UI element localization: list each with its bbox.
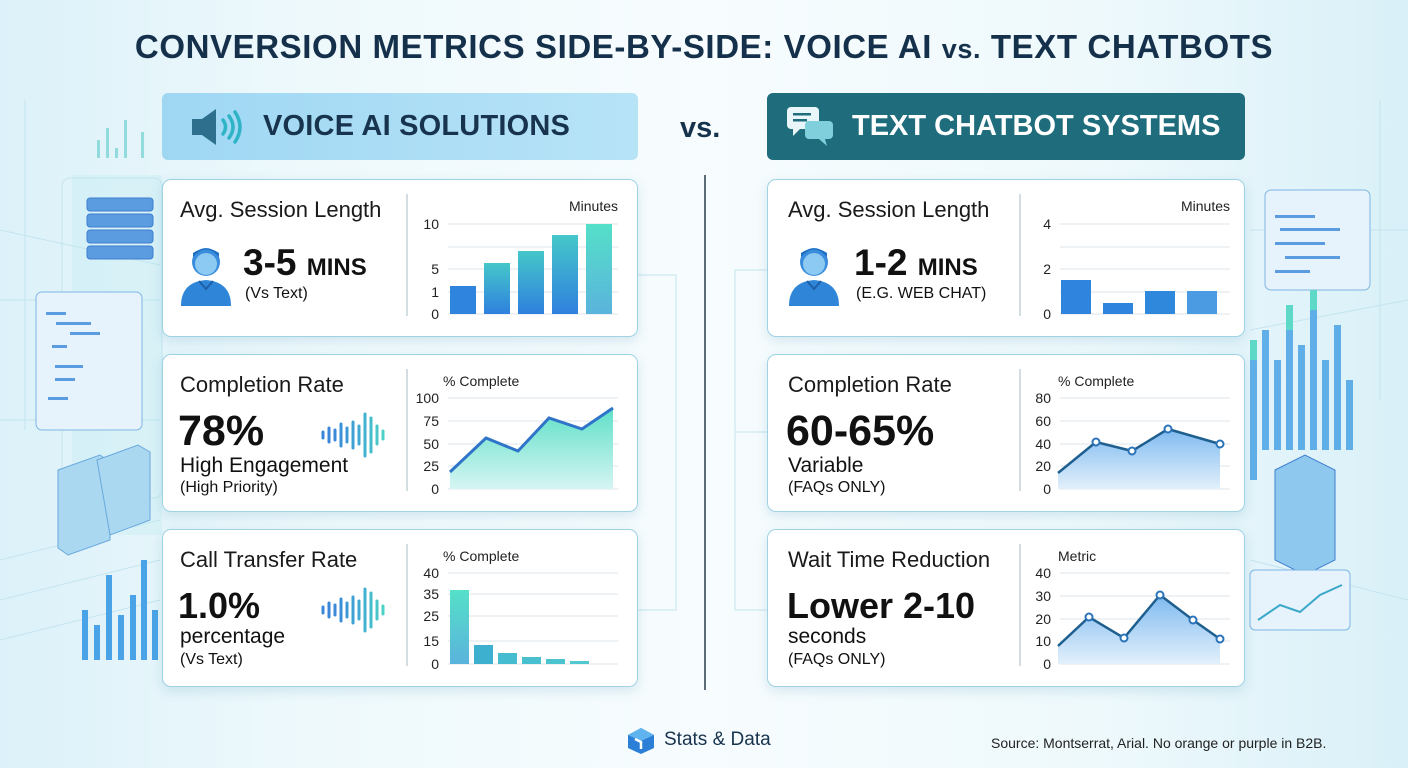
area chart: % complete bbox=[416, 373, 618, 497]
area chart: % complete: 100 bbox=[416, 390, 439, 406]
panel: voice avg session length: (Vs Text) bbox=[245, 285, 308, 302]
panel: chatbot avg session length: (E.G. WEB CHAT) bbox=[856, 285, 986, 302]
area chart: % complete: 40 bbox=[1035, 436, 1051, 452]
panel: chatbot wait time reduction: (FAQs ONLY) bbox=[788, 651, 886, 668]
panel: voice call transfer rate: percentage bbox=[180, 625, 285, 648]
icon: waveform bbox=[322, 588, 384, 632]
panel: voice avg session length: Avg. Session Length bbox=[180, 197, 381, 222]
bar chart: transfer: 15 bbox=[423, 633, 439, 649]
panel: voice call transfer rate bbox=[162, 529, 638, 687]
area chart: % complete: 0 bbox=[1043, 481, 1051, 497]
panel: chatbot wait time reduction bbox=[767, 529, 1245, 687]
panel: chatbot completion rate bbox=[767, 354, 1245, 512]
panel: chatbot avg session length: 1-2 MINS bbox=[854, 242, 978, 283]
panel: chatbot completion rate: 60-65% bbox=[786, 407, 934, 455]
bar chart: transfer: 35 bbox=[423, 586, 439, 602]
bar chart: minutes: Minutes bbox=[1181, 198, 1230, 214]
icon: person bbox=[181, 248, 231, 306]
bar chart: minutes: 0 bbox=[431, 306, 439, 322]
bar chart: minutes bbox=[423, 198, 618, 322]
bar chart: transfer: 0 bbox=[431, 656, 439, 672]
bar chart: transfer bbox=[423, 548, 618, 672]
panel: chatbot wait time reduction: Wait Time Reduction bbox=[788, 547, 990, 572]
panel: voice call transfer rate: 1.0% bbox=[178, 585, 260, 626]
panel: voice call transfer rate: Call Transfer Rate bbox=[180, 547, 357, 572]
area chart: metric: 10 bbox=[1035, 633, 1051, 649]
area chart: % complete: 0 bbox=[431, 481, 439, 497]
bar chart: transfer: % Complete bbox=[443, 548, 519, 564]
panel: chatbot completion rate: (FAQs ONLY) bbox=[788, 479, 886, 496]
bar chart: transfer: 25 bbox=[423, 608, 439, 624]
panel: voice completion rate: 78% bbox=[178, 407, 264, 455]
bar chart: minutes: 1 bbox=[431, 284, 439, 300]
area chart: % complete: 25 bbox=[423, 458, 439, 474]
area chart: % complete: % Complete bbox=[443, 373, 519, 389]
panel: voice completion rate bbox=[162, 354, 638, 512]
area chart: metric bbox=[1035, 548, 1230, 672]
area chart: metric: 30 bbox=[1035, 588, 1051, 604]
panel: chatbot avg session length bbox=[767, 179, 1245, 337]
bar chart: minutes: 4 bbox=[1043, 216, 1051, 232]
bar chart: minutes: Minutes bbox=[569, 198, 618, 214]
icon: person bbox=[789, 248, 839, 306]
area chart: % complete: 20 bbox=[1035, 458, 1051, 474]
area chart: metric: 40 bbox=[1035, 565, 1051, 581]
area chart: % complete bbox=[1035, 373, 1230, 497]
icon: waveform bbox=[322, 412, 384, 458]
bar chart: minutes: 0 bbox=[1043, 306, 1051, 322]
bar chart: minutes bbox=[1043, 198, 1230, 322]
title: CONVERSION METRICS SIDE-BY-SIDE: VOICE AI vs. TEXT CHATBOTS bbox=[135, 28, 1273, 65]
area chart: metric: 0 bbox=[1043, 656, 1051, 672]
source note: Source: Montserrat, Arial. No orange or purple in B2B. bbox=[991, 735, 1326, 751]
footer logo bbox=[628, 728, 771, 754]
area chart: % complete: 80 bbox=[1035, 390, 1051, 406]
area chart: % complete: 50 bbox=[423, 436, 439, 452]
header: voice ai: VOICE AI SOLUTIONS bbox=[263, 110, 570, 142]
area chart: metric: 20 bbox=[1035, 611, 1051, 627]
panel: chatbot completion rate: Completion Rate bbox=[788, 372, 952, 397]
panel: chatbot wait time reduction: Lower 2-10 bbox=[787, 585, 975, 626]
bar chart: minutes: 10 bbox=[423, 216, 439, 232]
header: text chatbot: TEXT CHATBOT SYSTEMS bbox=[852, 110, 1220, 142]
area chart: metric: Metric bbox=[1058, 548, 1096, 564]
footer logo: Stats & Data bbox=[664, 729, 771, 750]
panel: voice call transfer rate: (Vs Text) bbox=[180, 651, 243, 668]
panel: voice completion rate: Completion Rate bbox=[180, 372, 344, 397]
header: text chatbot bbox=[767, 93, 1245, 160]
icon: chat bubbles bbox=[787, 107, 833, 146]
panel: voice completion rate: High Engagement bbox=[180, 454, 348, 477]
panel: voice completion rate: (High Priority) bbox=[180, 479, 278, 496]
area chart: % complete: 60 bbox=[1035, 413, 1051, 429]
bar chart: minutes: 5 bbox=[431, 261, 439, 277]
panel: voice avg session length bbox=[162, 179, 638, 337]
icon: speaker bbox=[192, 109, 242, 145]
bar chart: minutes: 2 bbox=[1043, 261, 1051, 277]
bar chart: transfer: 40 bbox=[423, 565, 439, 581]
header: voice ai bbox=[162, 93, 638, 160]
area chart: % complete: % Complete bbox=[1058, 373, 1134, 389]
panel: chatbot wait time reduction: seconds bbox=[788, 625, 866, 648]
panel: chatbot avg session length: Avg. Session Length bbox=[788, 197, 989, 222]
vs label: vs. bbox=[680, 112, 720, 144]
icon: logo cube bbox=[628, 728, 654, 754]
area chart: % complete: 75 bbox=[423, 413, 439, 429]
panel: chatbot completion rate: Variable bbox=[788, 454, 864, 477]
panel: voice avg session length: 3-5 MINS bbox=[243, 242, 367, 283]
